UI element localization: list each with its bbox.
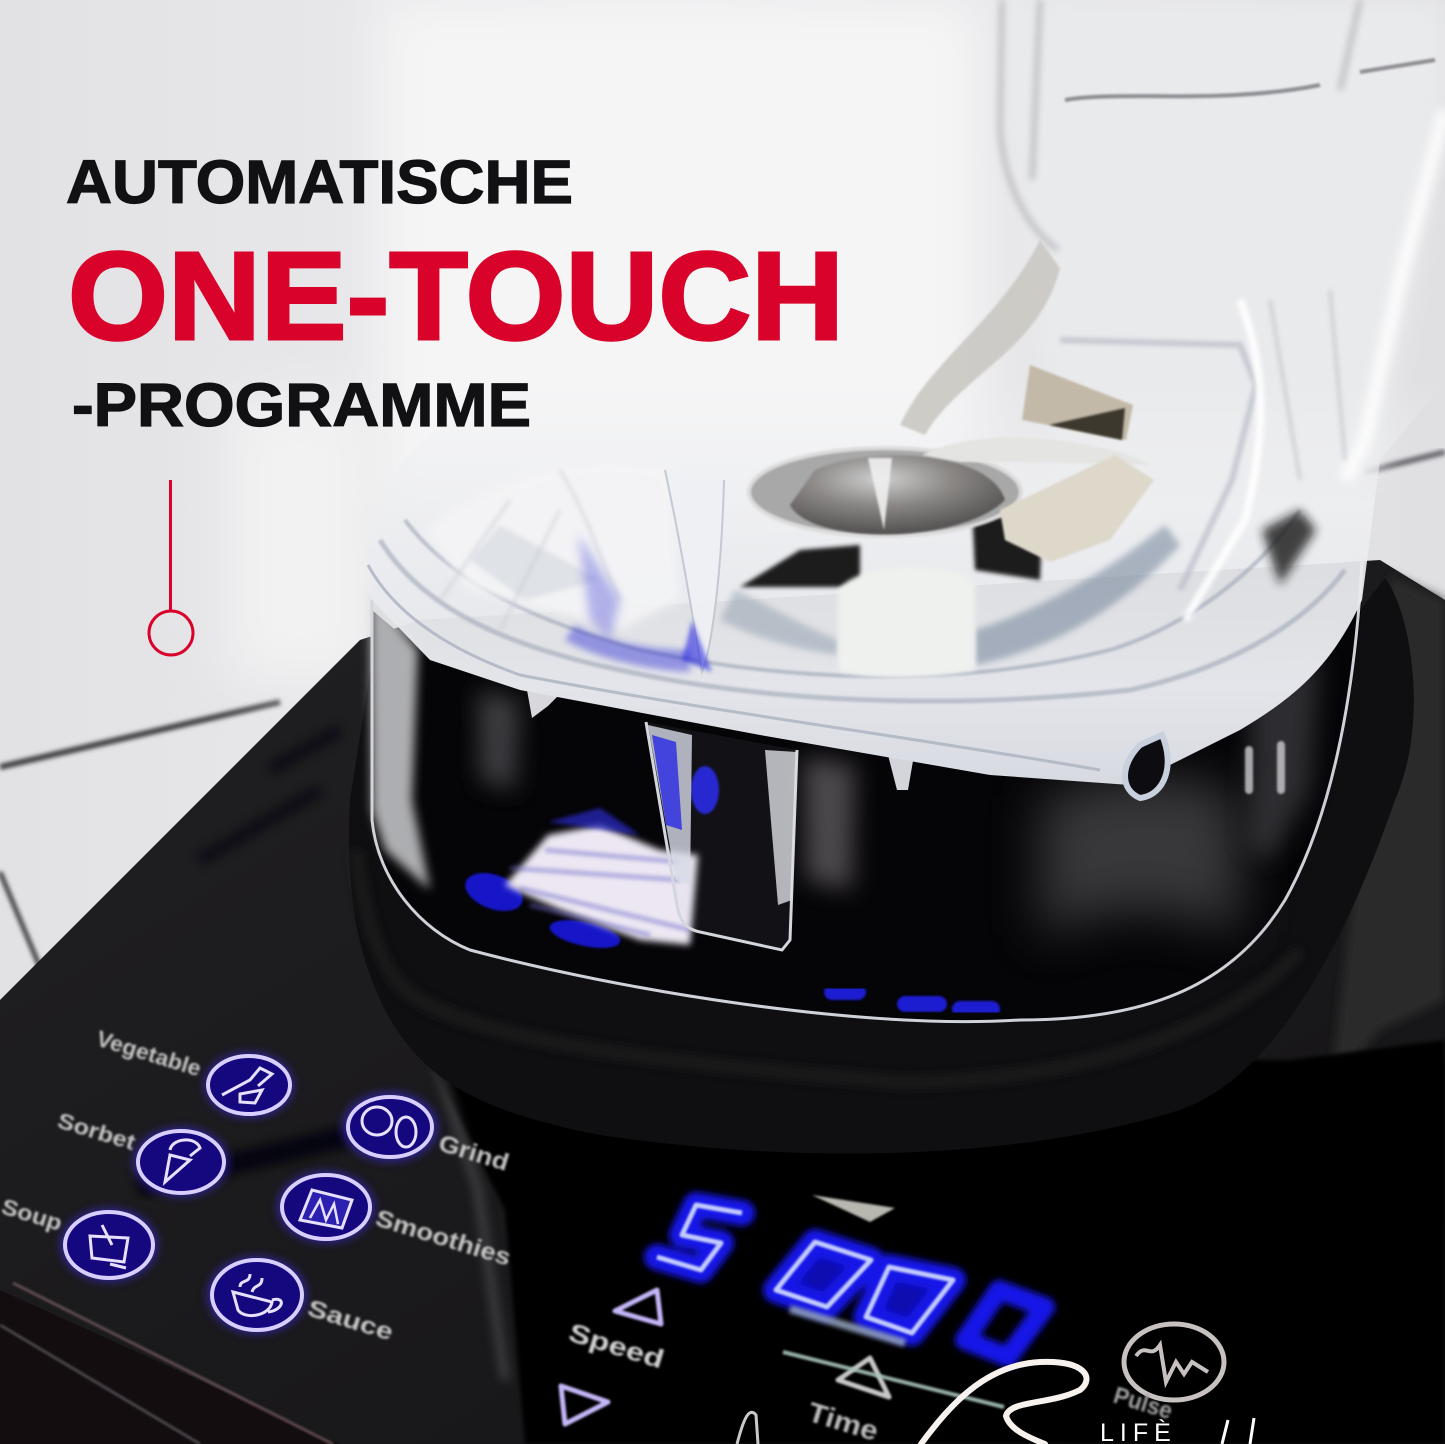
blender jar: measuring fin [527,690,914,950]
button: Speed controls: Speed [565,1317,668,1374]
blender jar: upper clear body [366,0,1445,798]
button: Smoothies [278,1172,514,1272]
upper jar lines [1065,60,1435,100]
control panel buttons [0,1026,1224,1444]
digital display: 5 000 [657,1195,1045,1357]
button: Grind [343,1093,512,1177]
blender base: black control surface [0,560,1445,1444]
title: Automatische One-Touch-Programme [66,148,844,439]
button: Vegetable [94,1026,293,1117]
button: Sorbet: Sorbet [55,1108,139,1155]
button: Vegetable: Vegetable [94,1026,204,1081]
heading line: -Programme: -PROGRAMME [72,371,531,439]
button: Sauce: Sauce [304,1295,396,1346]
button: Time controls: Time [804,1396,882,1444]
button: Pulse: Pulse [1110,1382,1176,1425]
brand logo: handwritten signature [921,1362,1254,1444]
rubber collar of the jar pad [349,578,1414,1154]
blade assembly [740,240,1154,678]
button: Speed controls [561,1290,668,1424]
glass reflection streak [783,1352,1004,1407]
blender jar: lower transparent section [370,560,1362,1022]
button: Soup: Soup [0,1194,65,1236]
reflected glare on the jar floor [460,808,698,953]
button: Grind: Grind [435,1130,512,1177]
callout pointer: red line and ring [149,480,193,655]
rim bands [368,510,1345,770]
button: Pulse [1110,1324,1224,1425]
heading line: One-Touch: ONE-TOUCH [68,227,844,366]
button: Sauce [208,1257,396,1346]
button: Sorbet [55,1108,228,1196]
inner blue-grey bowl band [975,525,1180,665]
button: Smoothies: Smoothies [372,1205,514,1272]
button: Soup [0,1194,157,1281]
button: Time controls [737,1358,889,1444]
heading line: Automatische: AUTOMATISCHE [66,148,573,216]
